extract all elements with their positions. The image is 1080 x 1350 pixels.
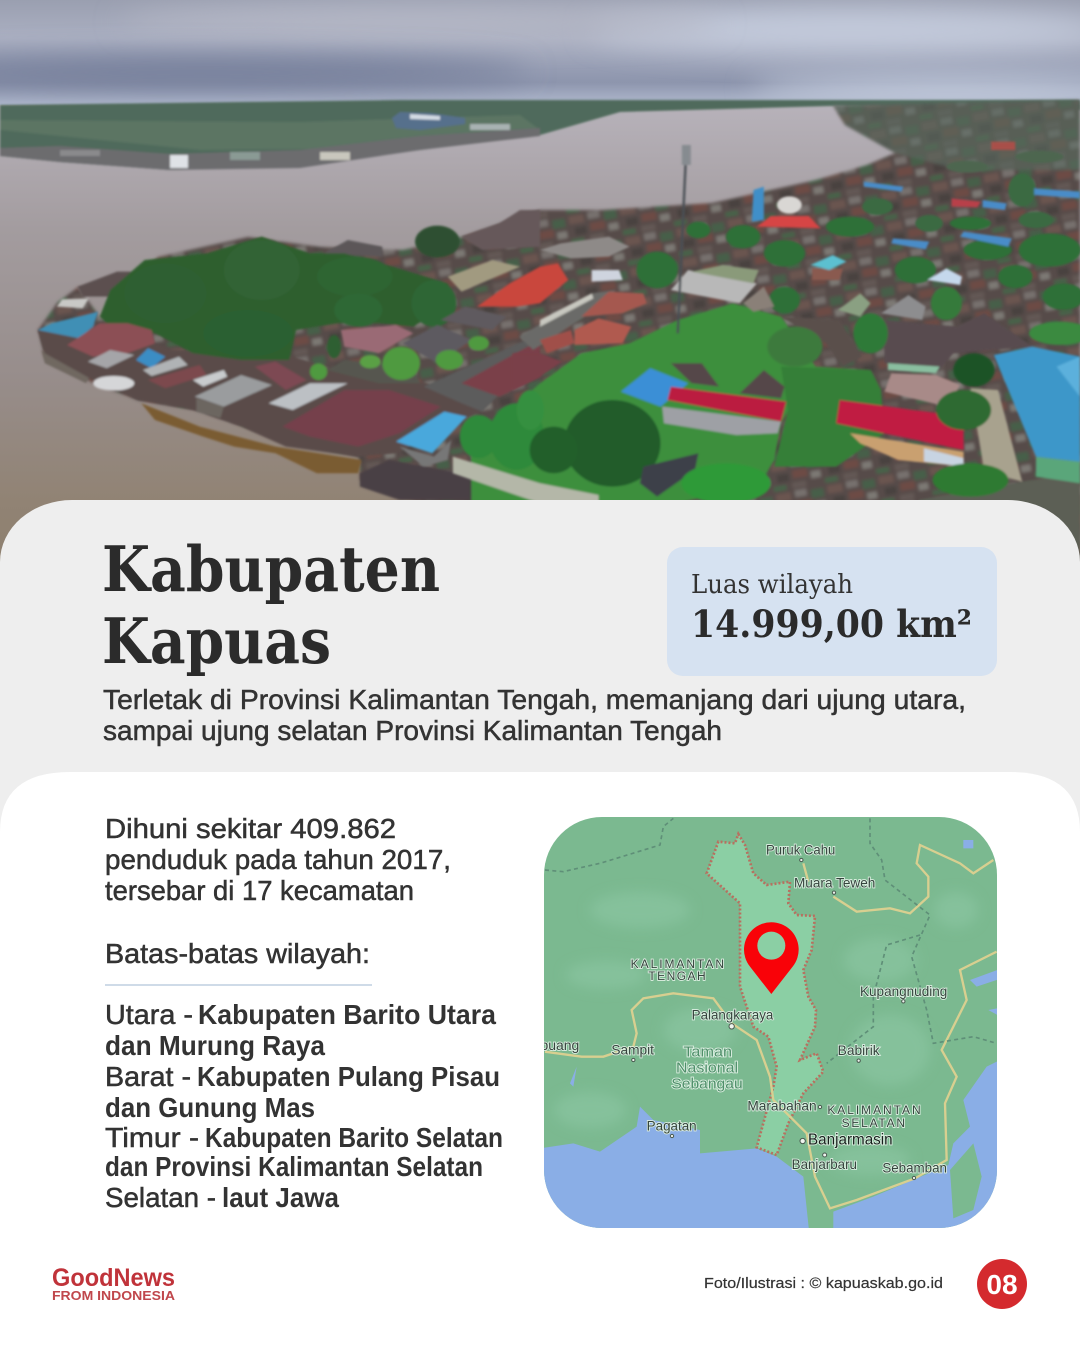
boundaries list: [105, 999, 503, 1213]
right part of town: buildings, mosque, tower: [453, 142, 1080, 590]
map of Kapuas regency: [544, 817, 997, 1228]
page number badge: 08: [986, 1269, 1018, 1300]
photo credit: Foto/Ilustrasi : © kapuaskab.go.id: [704, 1275, 943, 1292]
boundaries list: Barat -: [105, 1061, 191, 1092]
subtitle text: Terletak di Provinsi Kalimantan Tengah, memanjang dari ujung utara,: [103, 684, 966, 715]
page number badge: [977, 1259, 1027, 1309]
map place labels: TENGAH: [648, 969, 706, 983]
map place labels: Banjarbaru: [792, 1156, 857, 1172]
location pin: [744, 922, 799, 994]
province boundaries: [545, 818, 997, 1063]
white content panel: [0, 772, 1080, 1350]
boundaries list: Selatan -: [105, 1182, 216, 1213]
map place labels: Pembuang: [512, 1037, 579, 1053]
logo: GoodNews from Indonesia: GoodNews: [52, 1264, 175, 1292]
map place labels: KALIMANTAN: [827, 1103, 921, 1117]
hero photo: aerial view of river town: [0, 0, 1080, 600]
population text: [105, 813, 451, 906]
population text: Dihuni sekitar 409.862: [105, 813, 396, 844]
map place labels: Sebamban: [882, 1160, 947, 1176]
area callout: Luas wilayah: [691, 570, 853, 600]
boundaries heading: Batas-batas wilayah:: [105, 938, 370, 969]
town base: [38, 100, 1080, 600]
grey info panel: [0, 500, 1080, 900]
map place labels: Babirik: [838, 1042, 881, 1058]
map place labels: SELATAN: [842, 1116, 905, 1130]
area callout: 14.999,00 km²: [691, 602, 972, 646]
boundaries list: dan Gunung Mas: [105, 1092, 315, 1123]
boundaries list: Kabupaten Barito Utara: [198, 999, 497, 1030]
map place labels: Muara Teweh: [794, 874, 875, 890]
heading: Kabupaten Kapuas: [102, 532, 440, 678]
logo: GoodNews from Indonesia: [52, 1264, 175, 1303]
subtitle text: sampai ujung selatan Provinsi Kalimantan Tengah: [103, 715, 722, 746]
subtitle text: [103, 684, 966, 746]
heading: Kabupaten Kapuas: Kabupaten: [102, 532, 440, 606]
boundaries list: dan Provinsi Kalimantan Selatan: [105, 1151, 483, 1182]
map place labels: Marabahan: [747, 1098, 817, 1114]
river: [0, 105, 1080, 600]
city markers: [632, 858, 916, 1180]
sea: [544, 1062, 997, 1228]
map place labels: Pagatan: [647, 1117, 697, 1133]
heading: Kabupaten Kapuas: Kapuas: [102, 604, 331, 678]
boundaries list: dan Murung Raya: [105, 1030, 326, 1061]
far river bank: [0, 100, 1080, 170]
map place labels: [512, 842, 947, 1176]
boundaries list: Utara -: [105, 999, 193, 1030]
population text: tersebar di 17 kecamatan: [105, 875, 414, 906]
sky: [0, 0, 1080, 110]
roads: [545, 845, 997, 1208]
map place labels: Nasional: [676, 1061, 738, 1077]
boundaries list: Kabupaten Barito Selatan: [205, 1122, 503, 1153]
boundaries list: laut Jawa: [222, 1182, 340, 1213]
map place labels: Palangkaraya: [692, 1006, 774, 1022]
boundaries list: Kabupaten Pulang Pisau: [197, 1061, 500, 1092]
map place labels: Banjarmasin: [808, 1132, 893, 1149]
left part of town: trees, stilt houses: [38, 210, 568, 500]
logo: GoodNews from Indonesia: FROM INDONESIA: [52, 1289, 175, 1303]
area callout: [667, 547, 997, 676]
map place labels: Sampit: [611, 1041, 654, 1057]
terrain shading: [554, 892, 978, 1175]
map place labels: Sebangau: [671, 1077, 743, 1093]
map place labels: Puruk Cahu: [766, 842, 835, 858]
population text: penduduk pada tahun 2017,: [105, 844, 451, 875]
boundaries list: Timur -: [105, 1122, 199, 1153]
regency area: [707, 834, 823, 1155]
map place labels: KALIMANTAN: [631, 957, 724, 971]
map place labels: Kupangnuding: [860, 983, 947, 999]
map place labels: Taman: [683, 1045, 732, 1061]
